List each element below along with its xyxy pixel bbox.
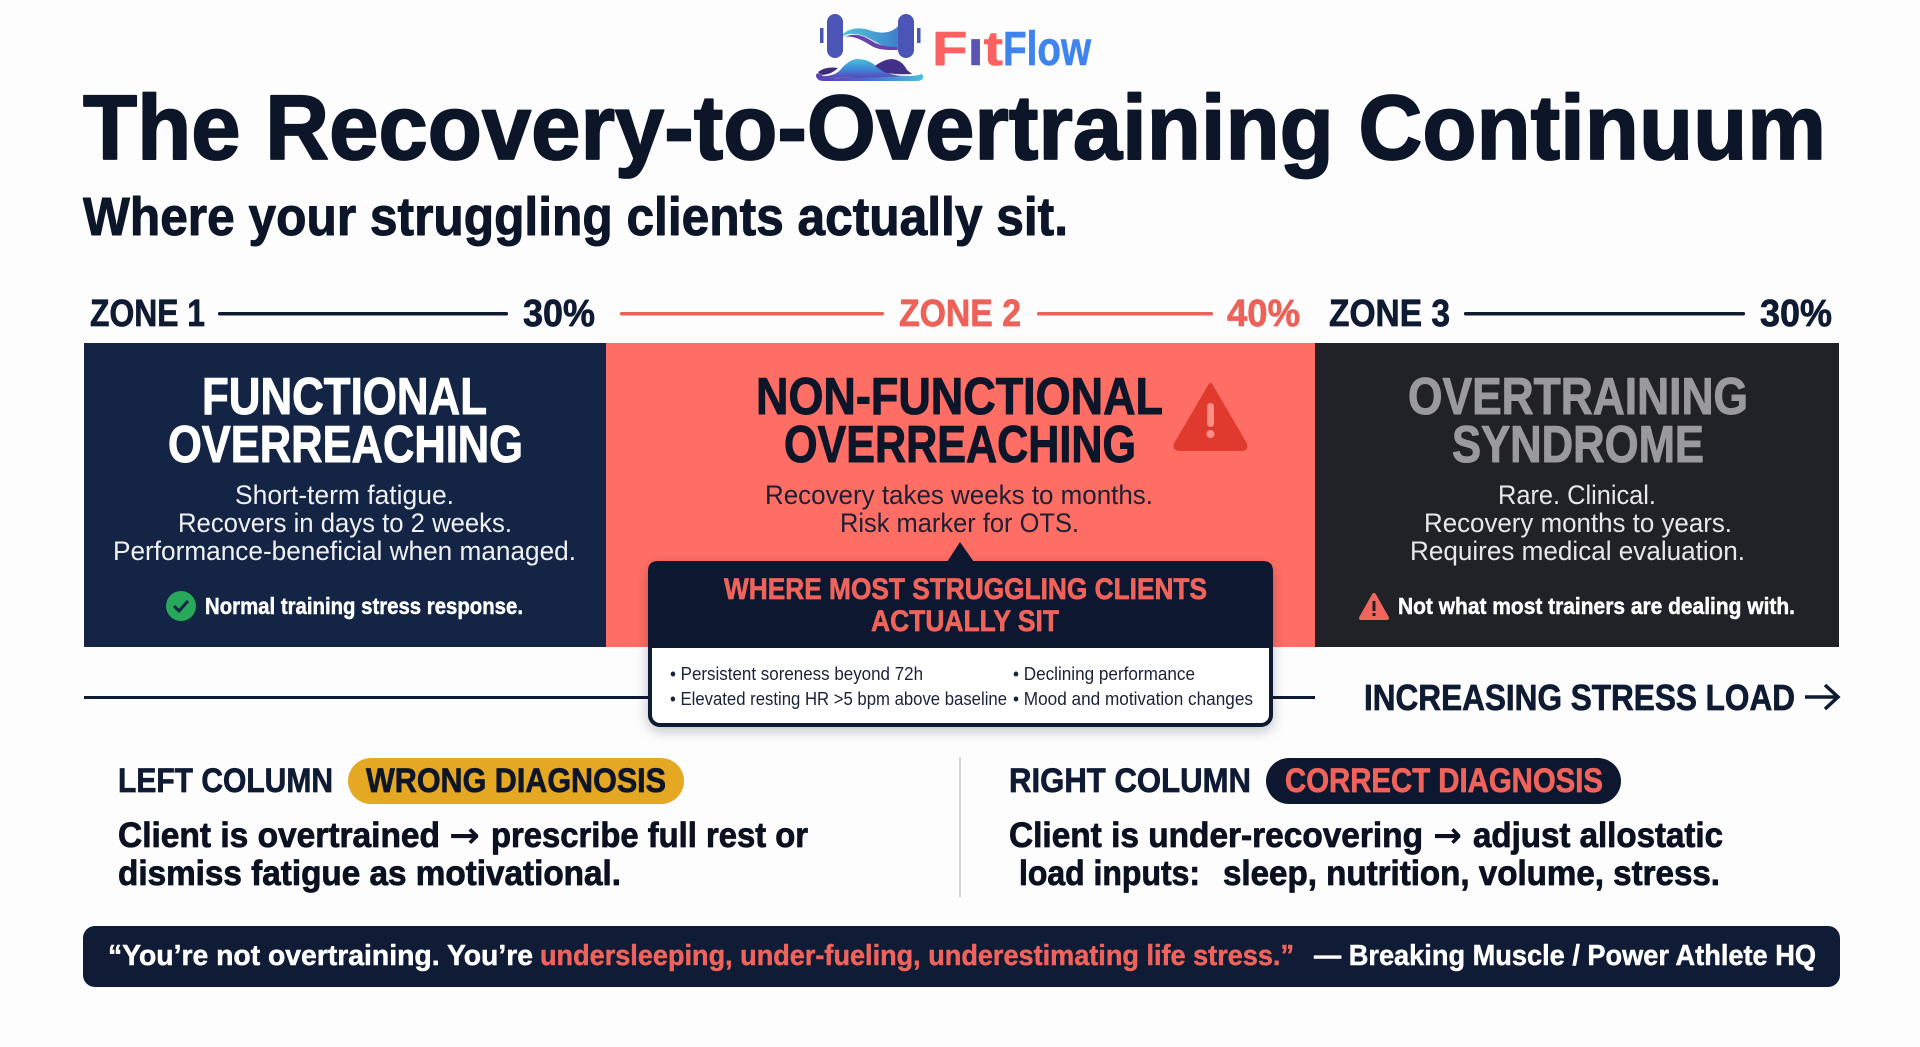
panel heading: OVERTRAINING <box>1408 368 1748 426</box>
left column text: → <box>449 816 480 856</box>
panel heading: NON-FUNCTIONAL <box>756 368 1163 426</box>
right column text: sleep, nutrition, volume, stress. <box>1223 854 1720 893</box>
zone 3 header: ZONE 3 <box>1329 293 1450 335</box>
panel description: Recovery takes weeks to months. <box>765 480 1153 510</box>
quote text: — Breaking Muscle / Power Athlete HQ <box>1314 940 1816 972</box>
right column text <box>1009 816 1723 893</box>
callout heading: WHERE MOST STRUGGLING CLIENTS <box>724 573 1207 606</box>
panel description <box>113 480 576 566</box>
left column text <box>118 816 808 893</box>
left column text: dismiss fatigue as motivational. <box>118 854 621 893</box>
panel heading: SYNDROME <box>1452 416 1704 474</box>
callout heading <box>724 573 1207 638</box>
callout bullet list: • Persistent soreness beyond 72h <box>670 663 923 684</box>
stress axis line <box>84 696 1315 699</box>
icon: green check <box>166 591 196 621</box>
quote text <box>108 940 1816 972</box>
panel description: Performance-beneficial when managed. <box>113 536 576 566</box>
panel description: Rare. Clinical. <box>1498 480 1656 510</box>
pill: wrong diagnosis: WRONG DIAGNOSIS <box>366 762 666 800</box>
arrow <box>1805 685 1838 709</box>
wordmark: Fıt <box>932 23 1000 76</box>
left column <box>118 758 808 893</box>
panel: non-functional overreaching <box>606 343 1315 647</box>
zone 1 header <box>90 293 595 335</box>
icon: warning triangle <box>1176 385 1246 449</box>
panel heading <box>756 368 1163 474</box>
panel heading <box>1408 368 1748 474</box>
panel description: Recovery months to years. <box>1424 508 1732 538</box>
note: Normal training stress response. <box>205 593 523 619</box>
left column label: LEFT COLUMN <box>118 762 333 800</box>
panel description: Short-term fatigue. <box>235 480 454 510</box>
note: Not what most trainers are dealing with. <box>1398 593 1795 619</box>
right column <box>1009 758 1723 893</box>
callout bullet list <box>670 663 1253 709</box>
panel description: Recovers in days to 2 weeks. <box>178 508 512 538</box>
right column text: → <box>1433 816 1462 856</box>
right column label: RIGHT COLUMN <box>1009 762 1251 800</box>
callout bullet list: • Declining performance <box>1013 663 1195 684</box>
zone 1 header: 30% <box>523 293 595 335</box>
axis label: increasing stress load: INCREASING STRESS LOAD <box>1364 677 1795 718</box>
callout: where most struggling clients sit <box>648 542 1273 725</box>
zone 2 header: 40% <box>1227 293 1300 335</box>
callout heading: ACTUALLY SIT <box>871 605 1059 638</box>
quote text: “You’re not overtraining. You’re <box>108 940 533 972</box>
icon: warning <box>1361 595 1387 618</box>
quote text: undersleeping, under-fueling, underestimating life stress.” <box>540 940 1294 972</box>
panel heading: FUNCTIONAL <box>202 368 487 426</box>
quote bar <box>83 926 1840 987</box>
icon: dumbbell with wave <box>816 14 923 81</box>
subtitle: Where your struggling clients actually sit. <box>83 187 1068 247</box>
zone 2 header <box>620 293 1300 335</box>
zone 3 header: 30% <box>1760 293 1832 335</box>
title: The Recovery-to-Overtraining Continuum <box>83 77 1826 179</box>
left column text: prescribe full rest or <box>491 816 808 855</box>
callout bullet list: • Mood and motivation changes <box>1013 688 1253 709</box>
panel: overtraining syndrome <box>1315 343 1839 647</box>
panel heading: OVERREACHING <box>168 416 523 474</box>
right column text: adjust allostatic <box>1473 816 1723 855</box>
panel description: Requires medical evaluation. <box>1410 536 1745 566</box>
panel description: Risk marker for OTS. <box>840 508 1079 538</box>
left column text: Client is overtrained <box>118 816 440 855</box>
panel description <box>1410 480 1745 566</box>
callout bullet list: • Elevated resting HR >5 bpm above baseline <box>670 688 1007 709</box>
panel heading <box>168 368 523 474</box>
wordmark: Flow <box>1003 23 1092 76</box>
logo: FitFlow <box>816 14 1092 81</box>
zone 2 header: ZONE 2 <box>899 293 1021 335</box>
right column text: load inputs: <box>1019 854 1200 893</box>
panel: functional overreaching <box>84 343 606 647</box>
panel heading: OVERREACHING <box>784 416 1136 474</box>
zone 3 header <box>1329 293 1832 335</box>
panel description <box>765 480 1153 538</box>
right column text: Client is under-recovering <box>1009 816 1423 855</box>
zone 1 header: ZONE 1 <box>90 293 205 335</box>
pill: correct diagnosis: CORRECT DIAGNOSIS <box>1285 762 1603 800</box>
